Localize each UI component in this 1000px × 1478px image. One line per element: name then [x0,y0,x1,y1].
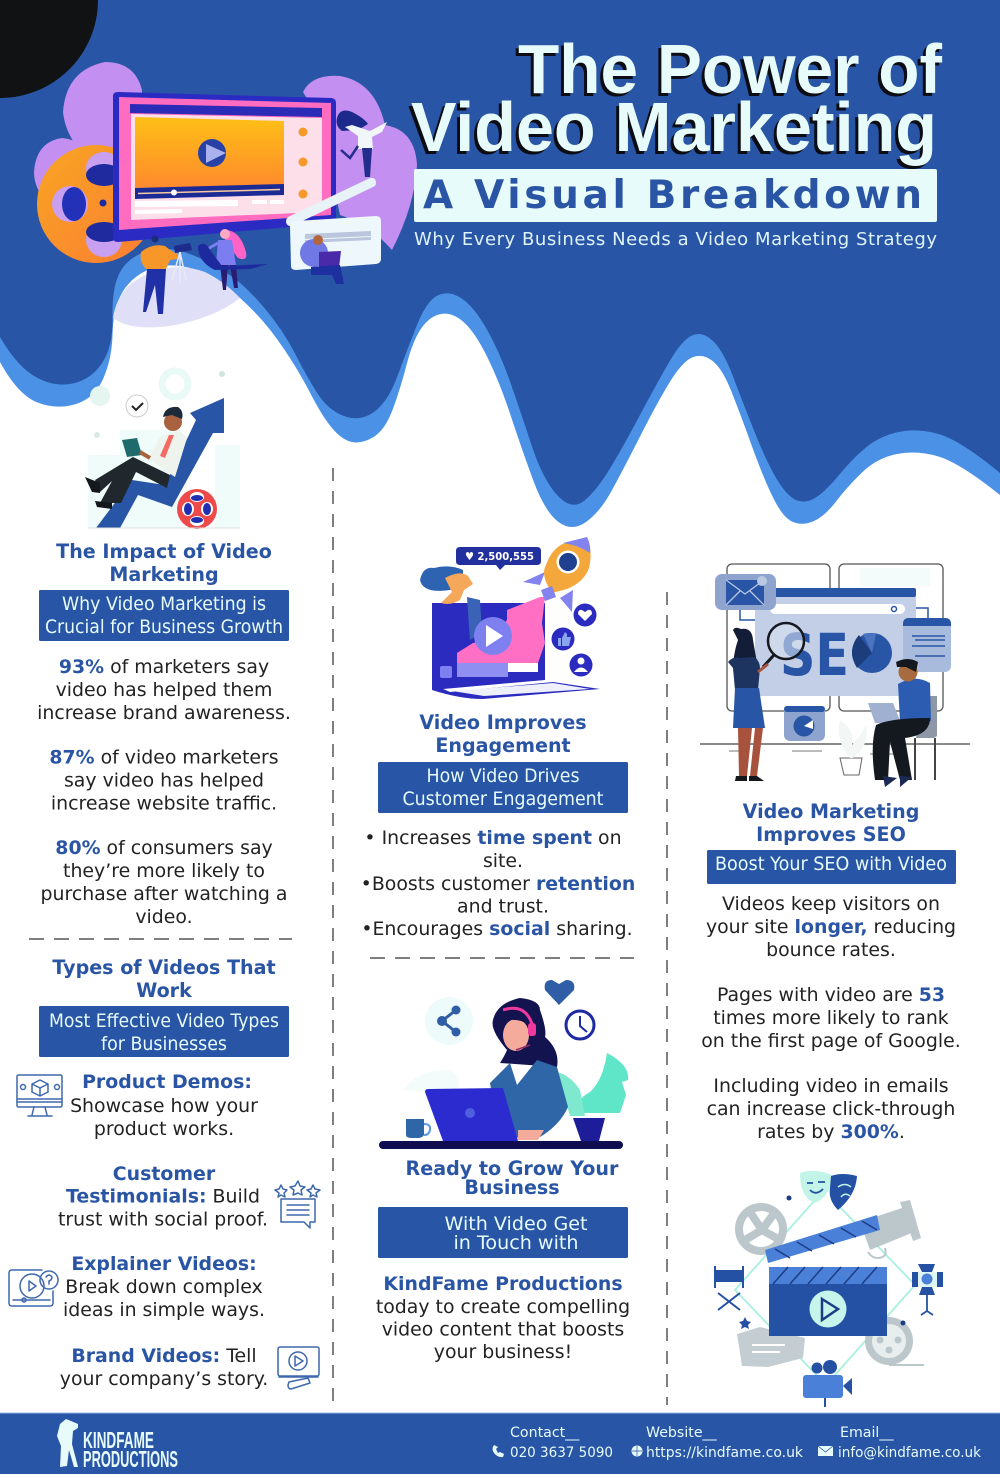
statistic: 93%: increase brand awareness. [37,702,291,724]
subheading banner: How Video Drives [426,766,580,787]
bullet: time spent: • Increases time spent on [364,827,622,849]
header wave background [0,0,1000,527]
heading: Business [464,1176,560,1199]
subtitle banner: A Visual Breakdown [423,173,922,218]
theatre masks [800,1171,857,1210]
heading: Video Marketing [743,800,919,823]
purple background blobs [34,62,417,250]
paragraph: visitors stay longer: your site longer, reducing [706,916,956,938]
illustration: SEO analysts: SE [780,621,849,689]
footer logo: PRODUCTIONS [83,1446,178,1472]
footer logo: KINDFAME [83,1427,154,1453]
icon: cameraman silhouette [57,1419,78,1467]
woman walking on clapper [337,110,387,177]
paragraph: email click-through: Including video in emails [713,1075,949,1097]
statistic: 80%: they’re more likely to [63,860,265,882]
subheading banner [39,590,289,641]
title: The Power of [518,30,943,108]
woman with magnifier [728,628,768,781]
subheading banner: Customer Engagement [402,789,604,810]
item: product demos: Showcase how your [70,1095,258,1117]
item: explainer videos: ideas in simple ways. [63,1299,265,1321]
social icons [552,604,596,676]
call to action text: your business! [434,1341,572,1363]
clapper board [769,1267,887,1336]
illustration: woman with headset at laptop [379,980,628,1149]
heading: Engagement [435,734,571,757]
website details: https://kindfame.co.uk [646,1445,804,1461]
subheading banner [707,850,956,884]
cameraman with orange top [141,236,192,314]
icon: explainer video question [9,1270,58,1306]
lilac ground ellipse [113,267,240,327]
item: brand videos: Brand Videos: Tell [71,1345,257,1367]
subheading banner: Why Video Marketing is [62,594,266,615]
item: explainer videos: Break down complex [65,1276,263,1298]
paragraph: rank on google: times more likely to rank [713,1007,949,1029]
right data card [903,618,951,672]
website details [632,1425,804,1461]
icon: brand video screen [278,1347,319,1389]
subheading banner [378,1207,628,1258]
subheading banner [378,762,628,813]
paragraph: email click-through: rates by 300%. [757,1121,905,1143]
heading: Ready to Grow Your [406,1157,619,1180]
subheading banner [39,1006,289,1057]
panel: ready to grow [376,980,630,1363]
email details: Email__ [840,1425,894,1441]
panel: types of videos [9,956,320,1390]
subheading banner: for Businesses [101,1034,227,1055]
icon: star rating speech bubble [275,1181,320,1228]
call to action text: today to create compelling [376,1296,630,1318]
man with laptop on chair [868,659,937,787]
icon: product demo monitor [17,1075,62,1116]
envelope card [715,574,776,610]
like counter bubble: ♥ 2,500,555 [465,550,534,563]
heading: Work [136,979,193,1002]
bullet: social sharing: •Encourages social sharing. [361,918,633,940]
illustration: SEO analysts [700,564,970,787]
panel: impact of video marketing [37,371,291,928]
item: brand videos: your company’s story. [60,1368,268,1390]
item: customer testimonials: Testimonials: Build [66,1186,260,1208]
heading: Types of Videos That [52,956,276,979]
illustration: businessman on rising arrow [85,371,240,529]
heading [406,1157,619,1199]
clapperboard with seated person [286,178,381,284]
pie chart card [784,706,825,741]
bullet: time spent: site. [483,850,523,872]
title: Video Marketing [411,88,937,166]
statistic: 80%: video. [135,906,193,928]
call to action text: video content that boosts [382,1318,624,1340]
like counter bubble [456,547,541,570]
statistic: 87%: increase website traffic. [51,792,277,814]
black corner circle [0,0,98,98]
heading [56,540,272,586]
hero illustration: video monitor with people [34,62,417,327]
rocket [523,537,591,612]
subheading banner: Most Effective Video Types [49,1011,279,1032]
statistic: 80%: 80% of consumers say [55,837,273,859]
heading [743,800,919,846]
item: product demos: product works. [94,1118,234,1140]
call to action text: KindFame Productions [383,1273,623,1295]
subheading banner: Boost Your SEO with Video [715,854,947,875]
panel: video marketing improves seo [700,564,970,1407]
contact details: 020 3637 5090 [510,1445,613,1461]
heading [52,956,276,1002]
item: explainer videos: Explainer Videos: [71,1253,257,1275]
heading: Marketing [109,563,219,586]
monitor [113,92,336,242]
column dividers [29,468,667,1405]
title [411,30,943,166]
subheading banner: With Video Get [444,1214,588,1235]
film reel [37,145,155,263]
spotlight [912,1264,943,1315]
subheading banner: Crucial for Business Growth [45,617,283,638]
paragraph: rank on google: Pages with video are 53 [717,984,945,1006]
statistic: 80%: purchase after watching a [40,883,288,905]
item: product demos: Product Demos: [82,1071,252,1093]
paragraph: visitors stay longer: Videos keep visitors on [722,893,940,915]
statistic: 93%: video has helped them [56,679,272,701]
bullet: retention: •Boosts customer retention [361,873,635,895]
ticket [737,1327,805,1367]
reel [865,1317,913,1365]
heading: The Impact of Video [56,540,272,563]
email details [818,1425,982,1461]
footer logo [57,1419,178,1472]
paragraph: rank on google: on the first page of Google. [701,1030,961,1052]
director chair [715,1266,743,1310]
clapper arm [765,1215,880,1263]
aperture [739,1207,783,1251]
tagline: Why Every Business Needs a Video Marketing Strategy [414,229,937,250]
heading: Improves SEO [756,823,906,846]
projector [860,1200,921,1250]
website details: Website__ [646,1425,718,1441]
footer bar [0,1413,1000,1474]
email details: info@kindfame.co.uk [838,1445,982,1461]
paragraph: email click-through: can increase click-through [707,1098,955,1120]
illustration: clapperboard and film icons [715,1171,943,1407]
item: customer testimonials: Customer [113,1163,216,1185]
subheading banner: in Touch with [454,1233,578,1254]
illustration: laptop with rocket [420,537,600,699]
contact details [492,1425,613,1461]
paragraph: visitors stay longer: bounce rates. [766,939,896,961]
statistic: 87%: 87% of video marketers [49,746,279,768]
bullet: retention: and trust. [457,896,549,918]
movie camera [803,1360,852,1407]
panel: video improves engagement [361,537,635,940]
statistic: 87%: say video has helped [64,770,264,792]
woman with pink hair [198,229,268,290]
heading: Video Improves [419,711,587,734]
statistic: 93%: 93% of marketers say [59,656,269,678]
heading [419,711,587,757]
item: customer testimonials: trust with social proof. [58,1208,268,1230]
contact details: Contact__ [510,1425,580,1441]
